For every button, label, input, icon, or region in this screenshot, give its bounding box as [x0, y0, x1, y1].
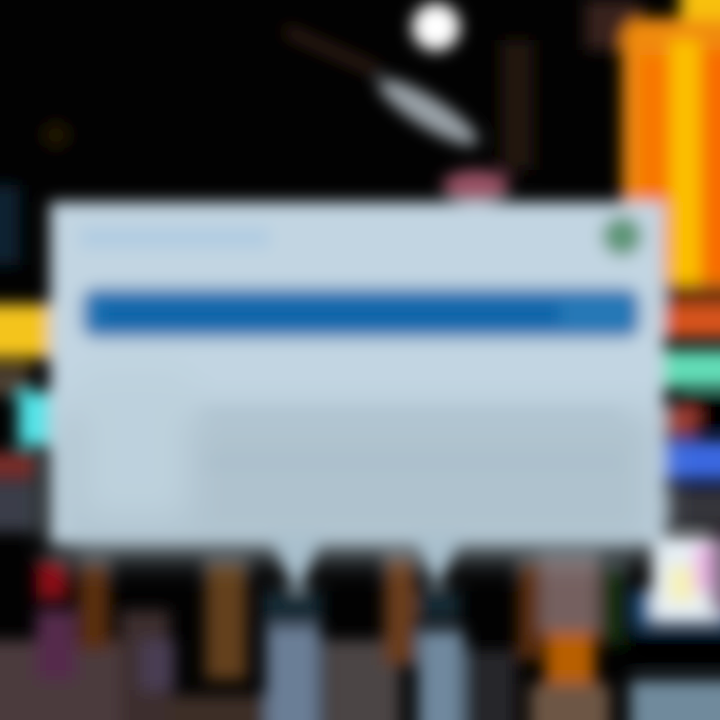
- top background glow: moon and streak: [42, 0, 640, 202]
- bottom figures: blurred legs: [0, 555, 624, 720]
- panel pointers below card: [268, 535, 324, 596]
- bright multicolor spot at lower right: [630, 536, 720, 720]
- table grid: faint rows: [80, 370, 620, 520]
- right edge colored bands: [660, 284, 720, 528]
- panel: main light card: [50, 202, 664, 596]
- icon: green badge: [602, 216, 642, 256]
- card heading: faint blurred title: [80, 228, 270, 248]
- left edge colored shapes: [0, 185, 52, 532]
- orange tower at top right: [622, 0, 720, 303]
- header bar: blue strip: [82, 288, 640, 338]
